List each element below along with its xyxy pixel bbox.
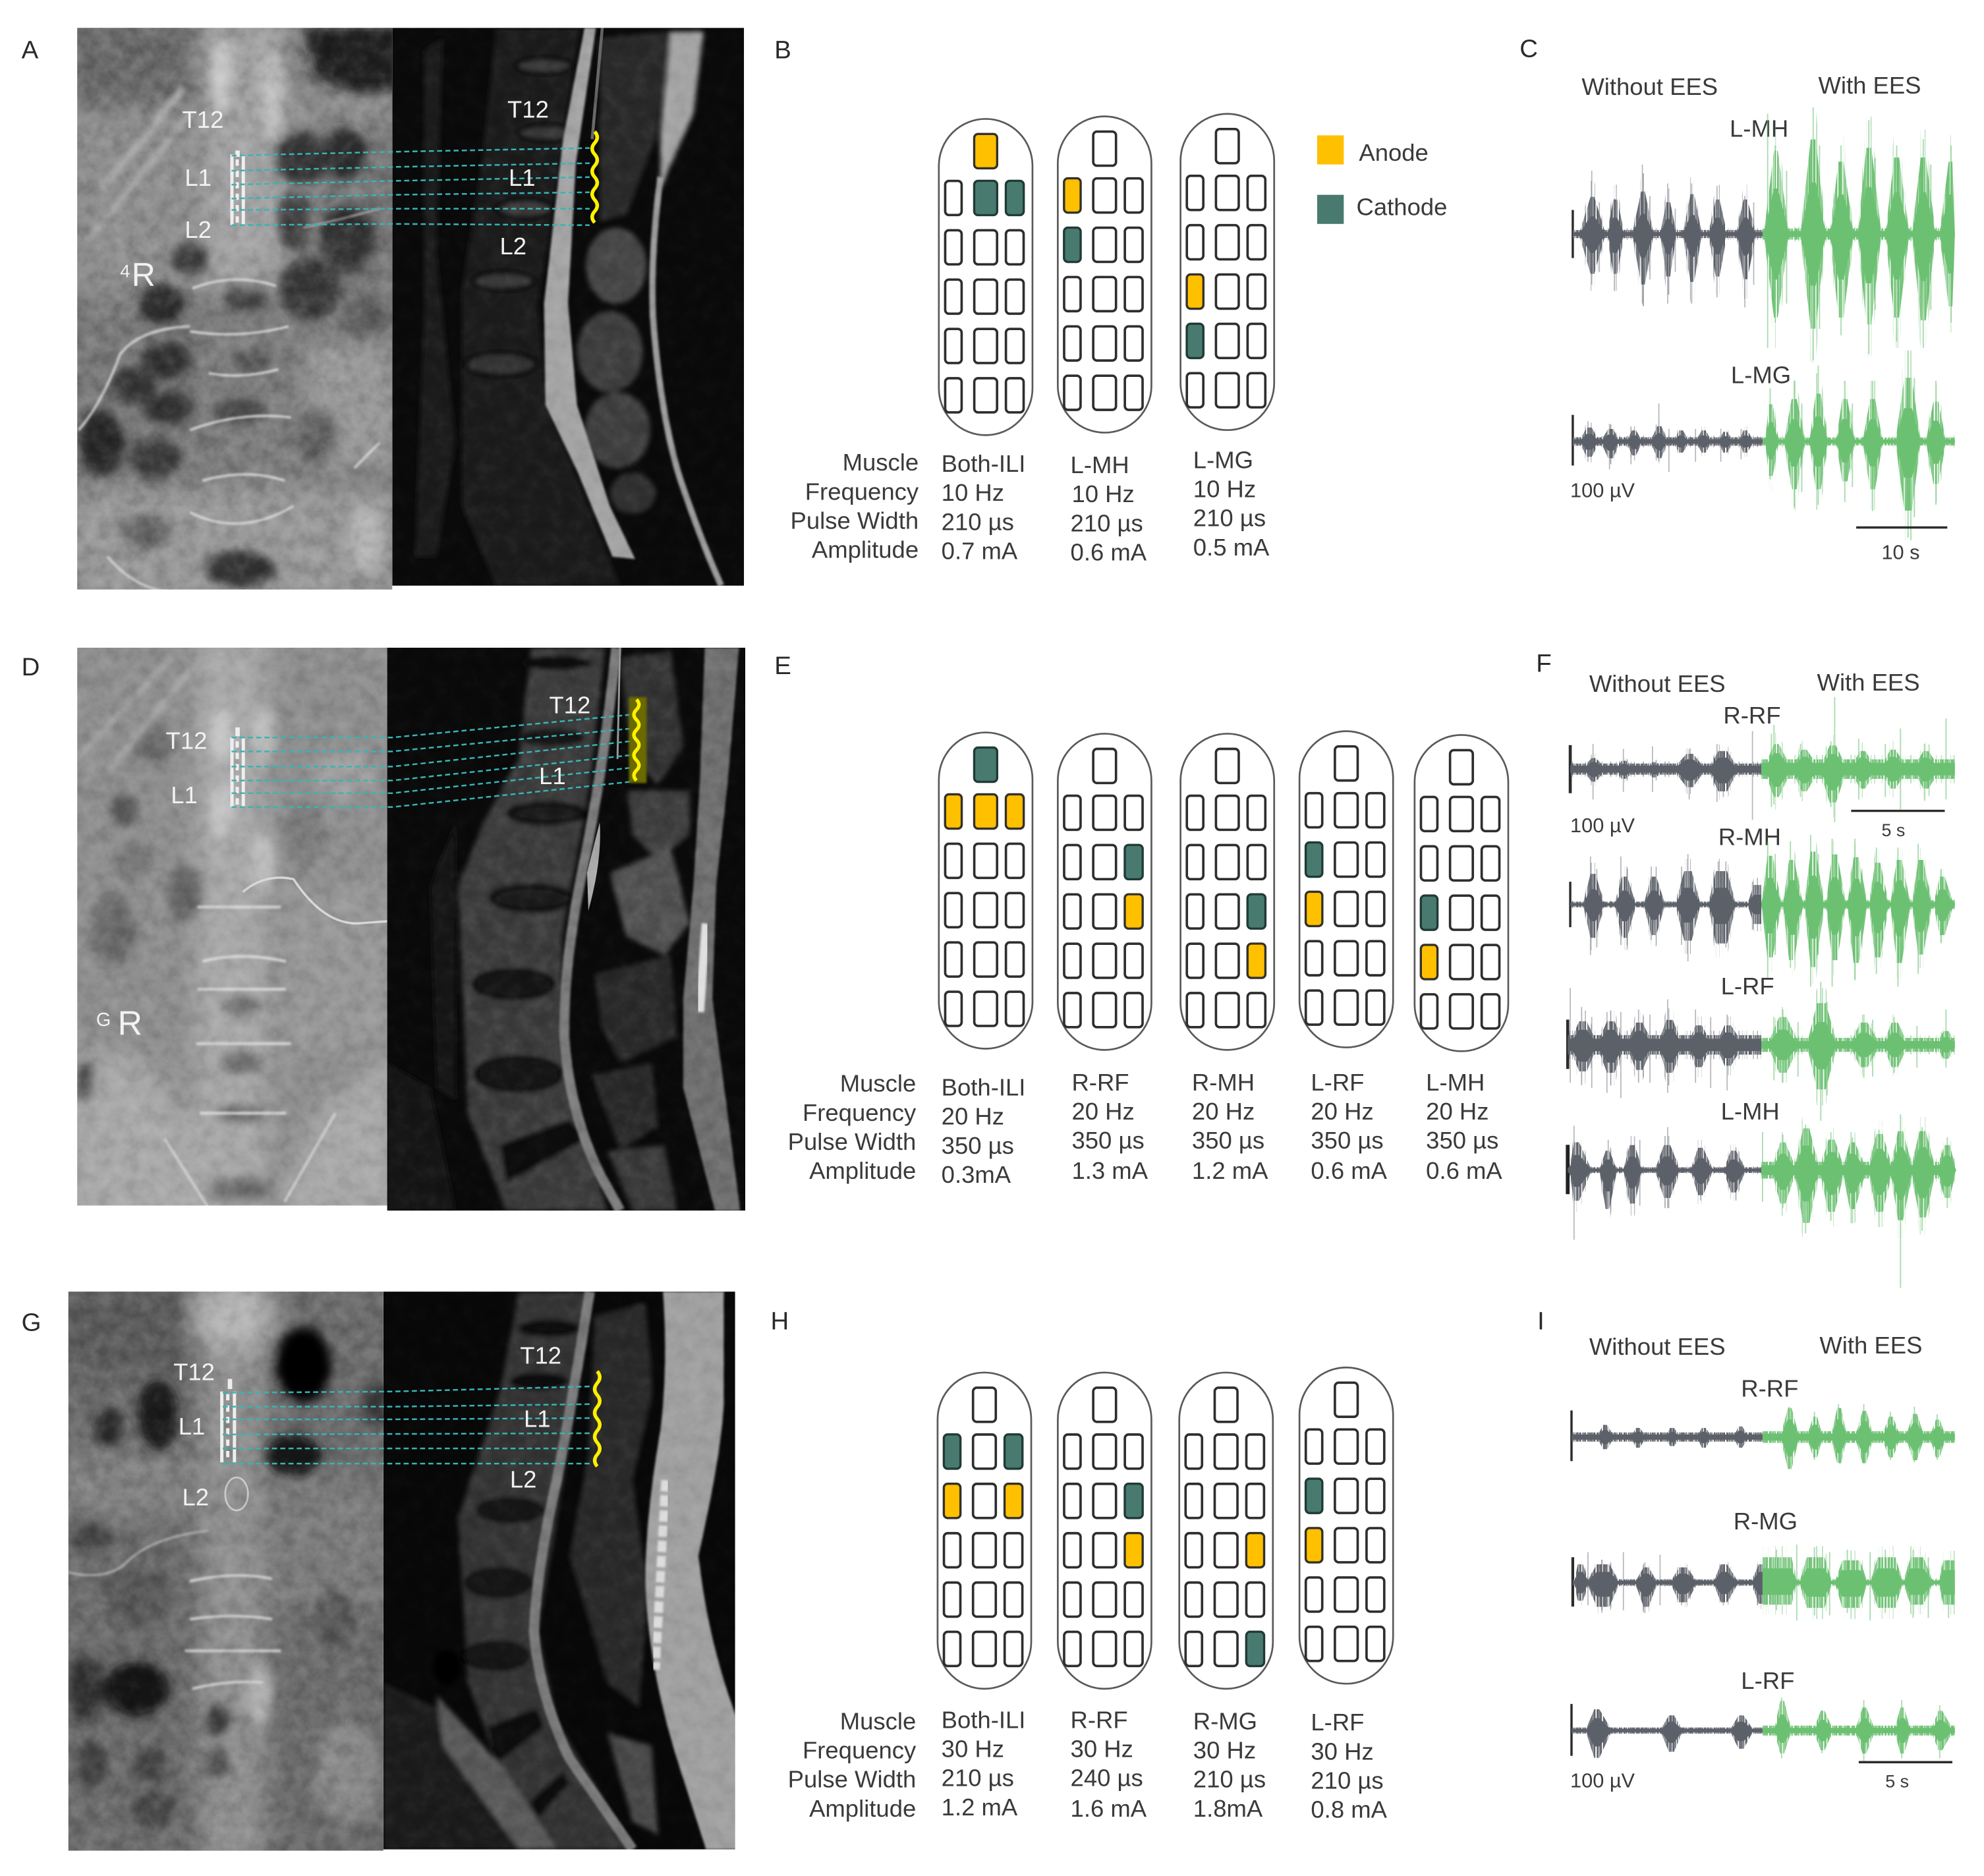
EMG trace R-MG I xyxy=(1573,1545,1955,1620)
parameter row labels E: Muscle xyxy=(840,1070,916,1097)
scale labels F xyxy=(1570,811,1944,840)
panel label F: F xyxy=(1536,649,1552,677)
vertebra labels A: L1 xyxy=(509,164,536,191)
panel label G: G xyxy=(22,1309,42,1337)
scale labels F: 100 µV xyxy=(1570,814,1635,837)
parameters Both-ILI B: Both-ILI xyxy=(942,450,1025,477)
parameters R-MG H xyxy=(1193,1707,1266,1822)
legend xyxy=(1317,135,1447,224)
EMG headings F xyxy=(1589,669,1920,697)
parameters L-RF H: 30 Hz xyxy=(1311,1738,1374,1765)
vertebra labels D: R xyxy=(118,1004,142,1042)
vertebra labels G: T12 xyxy=(520,1342,561,1369)
paddle: L-MG B xyxy=(1181,114,1274,430)
panel G: X-ray xyxy=(61,1280,392,1860)
parameters L-MH E: 0.6 mA xyxy=(1426,1157,1502,1184)
scale labels F: 5 s xyxy=(1881,820,1905,840)
scale labels C: 10 s xyxy=(1881,541,1920,564)
panel label E: E xyxy=(774,652,791,680)
muscle label R-RF I: R-RF xyxy=(1741,1375,1798,1402)
parameters R-MG H: 30 Hz xyxy=(1193,1736,1256,1763)
parameters L-MH B xyxy=(1071,451,1147,565)
parameter row labels E: Amplitude xyxy=(809,1157,916,1184)
EMG trace L-MH F xyxy=(1568,1113,1956,1288)
vertebra labels G: L1 xyxy=(524,1405,551,1432)
muscle label L-MH F: L-MH xyxy=(1721,1098,1780,1125)
parameters R-MH E: 1.2 mA xyxy=(1192,1157,1268,1184)
parameter row labels E: Pulse Width xyxy=(788,1128,916,1155)
muscle label L-MG C: L-MG xyxy=(1731,362,1791,389)
parameters R-MH E xyxy=(1192,1069,1268,1184)
vertebra labels A: L1 xyxy=(184,164,212,191)
parameters L-MG B xyxy=(1193,446,1270,561)
paddle: L-MH B xyxy=(1058,117,1151,433)
scale labels I xyxy=(1570,1762,1952,1792)
electrode lead on X-ray G xyxy=(220,1379,236,1462)
muscle label R-MH F: R-MH xyxy=(1718,823,1781,850)
parameter row labels E xyxy=(788,1070,917,1184)
parameter row labels B: Amplitude xyxy=(812,536,919,563)
vertebra labels D: G xyxy=(96,1009,111,1031)
parameters L-MG B: L-MG xyxy=(1193,446,1253,473)
electrode wave on MRI D xyxy=(629,697,646,783)
parameters Both-ILI E: 350 µs xyxy=(942,1132,1014,1159)
parameter row labels B: Frequency xyxy=(805,478,919,505)
parameter row labels B: Muscle xyxy=(843,449,919,476)
paddle: R-MH E xyxy=(1181,733,1274,1050)
muscle label R-MG I: R-MG xyxy=(1734,1508,1798,1535)
parameters R-RF H: 30 Hz xyxy=(1071,1736,1133,1763)
vertebra labels G xyxy=(173,1342,561,1511)
EMG trace L-RF I xyxy=(1572,1697,1955,1761)
paddle: L-RF E xyxy=(1299,731,1393,1048)
parameters L-RF H xyxy=(1311,1709,1388,1823)
paddle: R-RF E xyxy=(1058,733,1151,1050)
parameters R-RF E: 20 Hz xyxy=(1071,1098,1135,1125)
parameters Both-ILI H: 210 µs xyxy=(942,1765,1014,1792)
parameters R-RF H: 240 µs xyxy=(1071,1765,1143,1792)
connection lines A xyxy=(231,148,590,225)
parameters L-MH B: L-MH xyxy=(1071,451,1129,478)
parameters Both-ILI E: Both-ILI xyxy=(942,1074,1025,1101)
scale labels C: 100 µV xyxy=(1570,478,1635,501)
paddle: R-MG H xyxy=(1179,1373,1273,1689)
legend: Cathode xyxy=(1357,193,1447,220)
parameters R-MH E: 20 Hz xyxy=(1192,1098,1255,1125)
parameters Both-ILI H xyxy=(942,1706,1025,1821)
parameters Both-ILI H: 30 Hz xyxy=(942,1736,1004,1763)
paddle: R-RF H xyxy=(1058,1373,1151,1689)
parameters Both-ILI H: 1.2 mA xyxy=(942,1794,1018,1821)
panel A: X-ray xyxy=(70,19,399,601)
parameter row labels B xyxy=(791,449,919,563)
connection lines D xyxy=(231,715,630,807)
parameters L-RF E xyxy=(1311,1069,1388,1184)
parameters L-MH E: L-MH xyxy=(1426,1069,1485,1096)
parameters Both-ILI E xyxy=(942,1074,1025,1188)
electrode lead on X-ray A xyxy=(230,150,245,225)
parameters L-RF E: 0.6 mA xyxy=(1311,1157,1388,1184)
paddle: L-RF H xyxy=(1299,1367,1393,1684)
EMG headings C: Without EES xyxy=(1581,73,1718,100)
panel label I: I xyxy=(1537,1307,1545,1336)
parameter row labels E: Frequency xyxy=(803,1099,917,1126)
legend: Anode xyxy=(1359,139,1429,166)
parameters Both-ILI H: Both-ILI xyxy=(942,1706,1025,1733)
parameters L-MH E: 350 µs xyxy=(1426,1127,1498,1154)
vertebra labels A: L2 xyxy=(500,233,526,260)
panel D: MRI xyxy=(387,648,745,1210)
parameters Both-ILI E: 20 Hz xyxy=(942,1103,1004,1130)
parameters L-MH E xyxy=(1426,1069,1502,1184)
scale labels I: 5 s xyxy=(1885,1772,1909,1792)
parameters Both-ILI B: 210 µs xyxy=(942,508,1014,535)
parameters R-RF E xyxy=(1071,1069,1148,1184)
parameters L-RF H: 0.8 mA xyxy=(1311,1796,1388,1823)
scale labels C xyxy=(1570,478,1947,564)
muscle label R-RF F: R-RF xyxy=(1723,702,1781,729)
parameters R-MG H: R-MG xyxy=(1193,1707,1257,1734)
vertebra labels A: T12 xyxy=(507,96,549,123)
parameters L-MH B: 0.6 mA xyxy=(1071,538,1147,565)
paddle: Both-ILI E xyxy=(939,733,1033,1048)
vertebra labels G: L2 xyxy=(183,1484,209,1511)
parameters L-MH E: 20 Hz xyxy=(1426,1098,1488,1125)
paddle: Both-ILI B xyxy=(939,119,1033,435)
parameters Both-ILI B: 0.7 mA xyxy=(942,538,1018,565)
panel D: X-ray xyxy=(70,639,399,1221)
vertebra labels G: L2 xyxy=(510,1466,536,1493)
vertebra labels D xyxy=(96,692,590,1042)
parameter row labels H: Frequency xyxy=(803,1736,917,1763)
parameters L-RF H: L-RF xyxy=(1311,1709,1364,1736)
EMG headings I: With EES xyxy=(1819,1332,1922,1359)
panel label H: H xyxy=(770,1307,789,1336)
connection lines G xyxy=(223,1386,590,1464)
panel label A: A xyxy=(22,36,39,64)
parameters R-RF E: 350 µs xyxy=(1071,1127,1145,1154)
parameters L-MG B: 210 µs xyxy=(1193,505,1266,532)
vertebra labels D: L1 xyxy=(171,782,198,809)
parameter row labels H: Amplitude xyxy=(809,1795,916,1822)
panel G: MRI xyxy=(383,1292,738,1850)
panel label B: B xyxy=(774,36,791,64)
parameters L-MG B: 10 Hz xyxy=(1193,475,1256,502)
vertebra labels G: T12 xyxy=(173,1358,215,1385)
parameters L-RF H: 210 µs xyxy=(1311,1767,1384,1794)
parameters R-RF H: R-RF xyxy=(1071,1706,1128,1733)
parameter row labels H xyxy=(788,1707,917,1822)
EMG trace L-MG C xyxy=(1573,351,1955,540)
parameters R-RF E: R-RF xyxy=(1071,1069,1129,1096)
vertebra labels A xyxy=(120,96,549,293)
parameters L-RF E: 20 Hz xyxy=(1311,1098,1374,1125)
vertebra labels D: T12 xyxy=(166,727,207,754)
paddle: Both-ILI H xyxy=(938,1373,1031,1689)
electrode lead on X-ray D xyxy=(230,727,245,807)
vertebra labels G: L1 xyxy=(179,1413,205,1440)
EMG trace R-RF F xyxy=(1570,697,1955,822)
paddle: L-MH E xyxy=(1415,735,1508,1051)
parameters R-RF E: 1.3 mA xyxy=(1071,1157,1148,1184)
parameters L-MH B: 10 Hz xyxy=(1071,480,1135,507)
parameters L-MH B: 210 µs xyxy=(1071,509,1143,536)
vertebra labels A: R xyxy=(132,256,156,293)
parameters Both-ILI E: 0.3mA xyxy=(942,1161,1011,1188)
parameter row labels B: Pulse Width xyxy=(791,507,919,534)
panel label D: D xyxy=(22,653,40,681)
vertebra labels A: 4 xyxy=(120,261,130,281)
parameters R-MG H: 210 µs xyxy=(1193,1766,1266,1793)
parameters R-RF H: 1.6 mA xyxy=(1071,1795,1147,1822)
parameters L-RF E: L-RF xyxy=(1311,1069,1364,1096)
parameters R-MH E: 350 µs xyxy=(1192,1127,1264,1154)
EMG headings C xyxy=(1581,72,1921,100)
vertebra labels A: T12 xyxy=(183,106,223,133)
EMG trace L-MH C xyxy=(1573,105,1955,363)
parameter row labels H: Pulse Width xyxy=(788,1766,916,1793)
parameters L-RF E: 350 µs xyxy=(1311,1127,1384,1154)
EMG trace R-MH F xyxy=(1570,835,1955,986)
EMG headings I: Without EES xyxy=(1589,1333,1726,1360)
muscle label L-RF I: L-RF xyxy=(1741,1667,1794,1694)
scale labels I: 100 µV xyxy=(1570,1769,1635,1792)
panel A: MRI xyxy=(392,28,744,586)
EMG trace L-RF F xyxy=(1568,982,1955,1121)
vertebra labels A: L2 xyxy=(184,216,212,243)
panel label C: C xyxy=(1519,34,1538,63)
EMG trace R-RF I xyxy=(1572,1404,1955,1469)
EMG headings C: With EES xyxy=(1818,72,1921,99)
parameters Both-ILI B xyxy=(942,450,1025,565)
vertebra labels D: L1 xyxy=(539,762,566,789)
parameters R-MH E: R-MH xyxy=(1192,1069,1255,1096)
EMG headings F: Without EES xyxy=(1589,670,1726,697)
parameters Both-ILI B: 10 Hz xyxy=(942,479,1004,506)
parameters R-RF H xyxy=(1071,1706,1147,1822)
muscle label L-RF F: L-RF xyxy=(1721,973,1774,1000)
EMG headings F: With EES xyxy=(1817,669,1920,696)
parameter row labels H: Muscle xyxy=(840,1707,916,1734)
electrode wave on MRI A xyxy=(592,132,597,223)
muscle label L-MH C: L-MH xyxy=(1730,115,1788,142)
vertebra labels D: T12 xyxy=(549,692,590,719)
electrode wave on MRI G xyxy=(595,1371,600,1466)
EMG headings I xyxy=(1589,1332,1922,1360)
parameters L-MG B: 0.5 mA xyxy=(1193,534,1270,561)
parameters R-MG H: 1.8mA xyxy=(1193,1795,1263,1822)
